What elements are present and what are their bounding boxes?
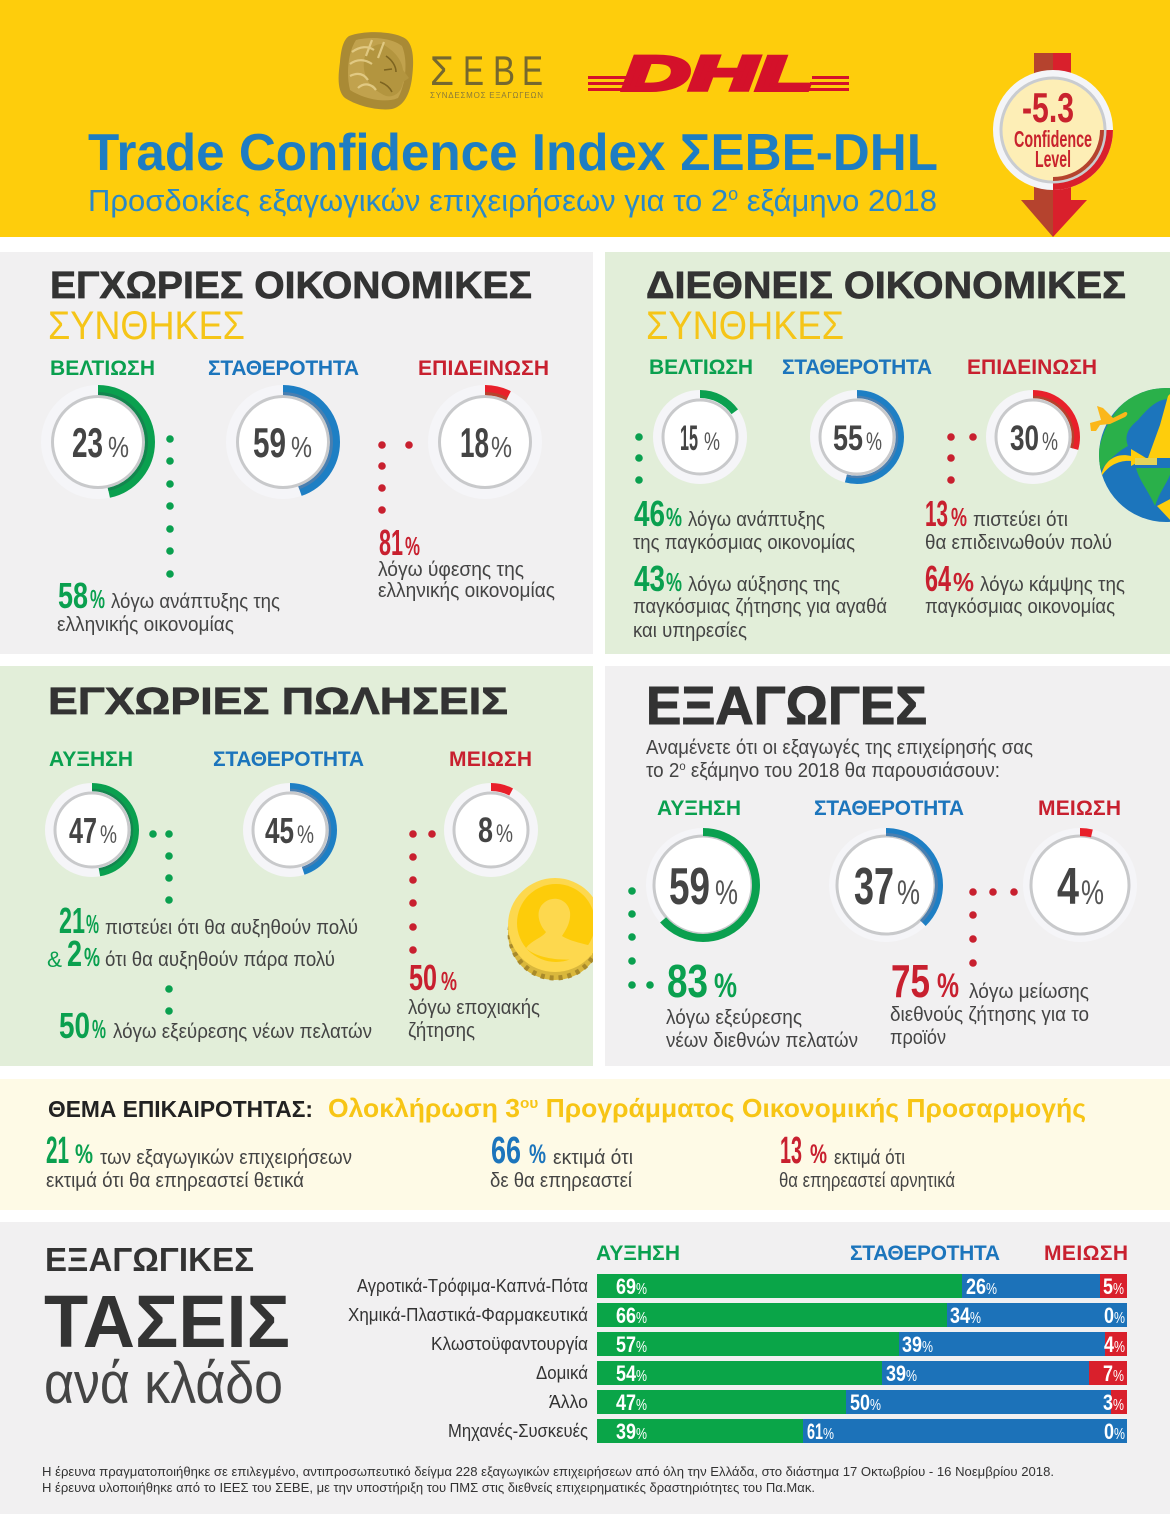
row: chemicals <box>348 1303 1127 1328</box>
improvement column label: ΒΕΛΤΙΩΣΗ <box>649 356 753 379</box>
heading: ΔΙΕΘΝΕΙΣ ΟΙΚΟΝΟΜΙΚΕΣ <box>646 265 1126 307</box>
increase column label: ΑΥΞΗΣΗ <box>49 748 133 771</box>
row: machinery: % <box>636 1426 647 1443</box>
row: construction: % <box>636 1368 647 1385</box>
improvement column label: ΒΕΛΤΙΩΣΗ <box>50 357 155 380</box>
row: agriculture: 69 <box>616 1274 636 1299</box>
stat 21% and 2%: % <box>84 942 100 972</box>
donut 55%: 55 <box>833 419 863 458</box>
stat 43%: λόγω αύξησης της <box>688 574 840 596</box>
stat 81%: ελληνικής οικονομίας <box>378 580 555 602</box>
stat 64%: λόγω κάμψης της <box>980 574 1125 596</box>
footnote <box>42 1464 1054 1495</box>
panel: header <box>0 0 1170 237</box>
donut 18%: % <box>491 432 512 464</box>
row: machinery: % <box>1114 1426 1125 1443</box>
row: construction: Δομικά <box>536 1363 588 1383</box>
donut 59%: 59 <box>253 419 286 466</box>
heading: ΕΞΑΓΩΓΙΚΕΣ <box>45 1241 254 1278</box>
stat 58%: λόγω ανάπτυξης της <box>111 591 280 613</box>
row: other: % <box>870 1397 881 1414</box>
row: textiles: 4 <box>1104 1332 1115 1357</box>
donut 59%: 59 <box>669 858 710 916</box>
logo: SEVE wordmark: Ε <box>463 47 484 94</box>
stat 50% new customers: % <box>92 1014 106 1044</box>
row: construction: 39 <box>886 1361 906 1386</box>
question: εξάμηνο του 2018 θα παρουσιάσουν: <box>686 760 1000 782</box>
row: textiles: 57 <box>616 1332 636 1357</box>
stat 58%: % <box>90 584 105 614</box>
row: machinery <box>448 1419 1127 1444</box>
donut 37% <box>829 828 943 942</box>
dotted connector green <box>149 830 173 1015</box>
stat 66%: 66 <box>491 1130 521 1172</box>
donut 55% <box>810 390 904 484</box>
donut 4%: % <box>1081 874 1104 912</box>
logo: SEVE wordmark: Β <box>493 47 515 94</box>
question <box>646 737 1033 782</box>
stat 21% and 2%: πιστεύει ότι θα αυξηθούν πολύ <box>105 917 358 939</box>
stat 81% <box>378 522 555 602</box>
donut 15% <box>653 390 747 484</box>
heading <box>48 265 532 348</box>
dotted connector red <box>969 888 1018 967</box>
worsening column label: ΕΠΙΔΕΙΝΩΣΗ <box>967 356 1097 379</box>
stat 13%: % <box>810 1139 827 1169</box>
donut 59% <box>646 828 760 942</box>
row: machinery: 61 <box>807 1419 823 1444</box>
stat 50% seasonal: λόγω εποχιακής <box>408 997 540 1019</box>
heading: ΕΞΑΓΩΓΕΣ <box>646 676 927 736</box>
row: machinery: Μηχανές-Συσκευές <box>448 1421 588 1441</box>
donut 59%: % <box>715 874 738 912</box>
question: Αναμένετε ότι οι εξαγωγές της επιχείρησής σας <box>646 737 1033 759</box>
row: machinery: 39 <box>616 1419 636 1444</box>
row: agriculture: Αγροτικά-Τρόφιμα-Καπνά-Πότα <box>357 1276 588 1296</box>
row: machinery: 0 <box>1104 1419 1114 1444</box>
donut 23% <box>41 385 155 499</box>
subtitle: ο <box>728 184 738 204</box>
stat 75%: διεθνούς ζήτησης για το <box>890 1004 1089 1026</box>
dotted connector red <box>409 830 436 954</box>
decrease column label: ΜΕΙΩΣΗ <box>449 748 532 771</box>
dotted connector green <box>166 435 174 578</box>
heading: ανά κλάδο <box>44 1351 283 1416</box>
heading: ΤΑΣΕΙΣ <box>44 1280 290 1363</box>
donut 4% <box>1023 828 1137 942</box>
row: other: % <box>636 1397 647 1414</box>
stat 64%: παγκόσμιας οικονομίας <box>925 596 1115 618</box>
row: textiles <box>431 1332 1127 1357</box>
row: machinery: % <box>823 1426 834 1443</box>
stat 46%: 46 <box>634 493 665 534</box>
row: other: 50 <box>850 1390 870 1415</box>
donut 30%: % <box>1042 428 1058 456</box>
stat 13%: % <box>951 502 967 532</box>
stat 13%: πιστεύει ότι <box>973 509 1068 531</box>
panel: exports <box>605 666 1170 1066</box>
donut 8%: % <box>496 820 513 848</box>
logo: SEVE wordmark: ΣΥΝΔΕΣΜΟΣ ΕΞΑΓΩΓΕΩΝ <box>430 91 543 100</box>
stat 13%: 13 <box>780 1130 802 1172</box>
logo: SEVE wordmark: Σ <box>430 47 454 94</box>
donut 45% <box>243 783 337 877</box>
row: chemicals: % <box>1114 1310 1125 1327</box>
stat 13% <box>925 493 1112 554</box>
stat 43%: παγκόσμιας ζήτησης για αγαθά <box>633 596 887 618</box>
stat 21% and 2%: 21 <box>59 900 85 941</box>
stat 46%: της παγκόσμιας οικονομίας <box>633 532 855 554</box>
footnote: Η έρευνα υλοποιήθηκε από το ΙΕΕΣ του ΣΕΒΕ, με την υποστήριξη του ΠΜΣ στις διεθνείς επιχειρηματικές δραστηριότητες του Πα.Μακ. <box>42 1480 815 1495</box>
confidence badge: Level <box>1035 146 1071 172</box>
row: textiles: % <box>922 1339 933 1356</box>
row: construction: 54 <box>616 1361 637 1386</box>
stat 50% seasonal: % <box>441 966 457 996</box>
donut 23%: % <box>108 432 129 464</box>
stat 21% and 2% <box>47 900 358 974</box>
stat 13%: θα επηρεαστεί αρνητικά <box>779 1170 955 1192</box>
row: chemicals: 0 <box>1104 1303 1114 1328</box>
donut 47% <box>45 783 139 877</box>
stat 64% <box>925 558 1125 618</box>
row: construction <box>536 1361 1127 1386</box>
stat 21% and 2%: 2 <box>67 933 82 974</box>
row: construction: % <box>906 1368 917 1385</box>
donut 47%: 47 <box>69 810 97 851</box>
stat 75%: προϊόν <box>890 1027 946 1049</box>
stat 46% <box>633 493 855 554</box>
stat 21% and 2%: ότι θα αυξηθούν πάρα πολύ <box>105 949 335 971</box>
stat 21%: των εξαγωγικών επιχειρήσεων <box>100 1147 352 1169</box>
stat 50% seasonal <box>408 957 540 1042</box>
logo: DHL: DHL <box>623 48 813 101</box>
stat 83%: 83 <box>667 955 708 1007</box>
stat 66%: % <box>529 1139 546 1169</box>
row: agriculture: 26 <box>966 1274 986 1299</box>
stat 83% <box>666 955 858 1052</box>
stat 64%: 64 <box>925 558 951 599</box>
stability column label: ΣΤΑΘΕΡΟΤΗΤΑ <box>814 797 964 820</box>
stat 58% <box>57 575 280 636</box>
heading: ΣΥΝΘΗΚΕΣ <box>646 304 844 348</box>
row: chemicals: Χημικά-Πλαστικά-Φαρμακευτικά <box>348 1305 588 1325</box>
icon: globe with plane <box>1090 385 1170 525</box>
stat 58%: ελληνικής οικονομίας <box>57 614 234 636</box>
dotted connector red <box>947 433 977 484</box>
donut 30% <box>986 390 1080 484</box>
subtitle: Προσδοκίες εξαγωγικών επιχειρήσεων για το 2 <box>88 183 728 218</box>
theme title: Ολοκλήρωση 3 <box>328 1093 516 1123</box>
stability column label: ΣΤΑΘΕΡΟΤΗΤΑ <box>782 356 932 379</box>
stat 50% seasonal: ζήτησης <box>408 1020 475 1042</box>
donut 23%: 23 <box>72 419 103 466</box>
heading <box>646 265 1126 348</box>
subtitle: εξάμηνο 2018 <box>738 183 937 218</box>
increase column label: ΑΥΞΗΣΗ <box>657 797 741 820</box>
donut 47%: % <box>100 821 117 849</box>
stat 50% new customers <box>59 1005 372 1046</box>
stat 21% <box>46 1130 352 1192</box>
donut 59%: % <box>291 432 312 464</box>
row: chemicals: % <box>970 1310 981 1327</box>
row: chemicals: % <box>636 1310 647 1327</box>
row: textiles: Κλωστοϋφαντουργία <box>431 1334 588 1354</box>
donut 45%: % <box>297 821 314 849</box>
row: chemicals: 66 <box>616 1303 636 1328</box>
donut 8%: 8 <box>478 811 493 850</box>
stat 43% <box>633 558 887 642</box>
stat 50% new customers: λόγω εξεύρεσης νέων πελατών <box>113 1021 372 1043</box>
theme title: Προγράμματος Οικονομικής Προσαρμογής <box>538 1093 1086 1123</box>
row: construction: % <box>1113 1368 1124 1385</box>
panel: domestic economic conditions <box>0 252 593 654</box>
title: Trade Confidence Index ΣΕΒΕ-DHL <box>88 124 938 182</box>
stat 13%: εκτιμά ότι <box>834 1147 905 1169</box>
donut 37%: 37 <box>854 858 894 916</box>
row: agriculture: % <box>1113 1281 1124 1298</box>
panel: topical theme <box>0 1079 1170 1210</box>
confidence badge: -5.3 <box>1022 84 1074 131</box>
stat 81%: 81 <box>379 522 403 563</box>
stat 13% <box>779 1130 955 1192</box>
stat 64%: % <box>953 567 974 597</box>
stat 21% and 2%: % <box>86 909 99 939</box>
row: agriculture: % <box>636 1281 647 1298</box>
row: agriculture: 5 <box>1103 1274 1113 1299</box>
stat 43%: 43 <box>634 558 665 599</box>
stat 21%: εκτιμά ότι θα επηρεαστεί θετικά <box>46 1170 304 1192</box>
legend header increase: ΑΥΞΗΣΗ <box>596 1242 680 1265</box>
donut 4%: 4 <box>1057 858 1079 916</box>
row: chemicals: 34 <box>950 1303 971 1328</box>
stat 13%: θα επιδεινωθούν πολύ <box>925 532 1112 554</box>
stat 13%: 13 <box>925 493 948 534</box>
donut 18% <box>428 385 542 499</box>
heading <box>44 1241 290 1416</box>
stat 75% <box>890 955 1089 1049</box>
worsening column label: ΕΠΙΔΕΙΝΩΣΗ <box>418 357 549 380</box>
stat 21%: 21 <box>46 1130 69 1172</box>
stat 75%: % <box>937 967 959 1005</box>
row: textiles: % <box>636 1339 647 1356</box>
stat 46%: λόγω ανάπτυξης <box>688 509 825 531</box>
stat 50% new customers: 50 <box>59 1005 90 1046</box>
question: ο <box>679 759 686 773</box>
donut 45%: 45 <box>265 810 294 851</box>
stat 83%: λόγω εξεύρεσης <box>666 1007 802 1029</box>
stability column label: ΣΤΑΘΕΡΟΤΗΤΑ <box>208 357 359 380</box>
panel: export trends by sector <box>0 1222 1170 1514</box>
row: construction: 7 <box>1103 1361 1113 1386</box>
dotted connector green <box>628 887 654 989</box>
stat 81%: % <box>405 531 420 561</box>
stat 81%: λόγω ύφεσης της <box>378 559 524 581</box>
row: other: % <box>1113 1397 1124 1414</box>
theme label: ΘΕΜΑ ΕΠΙΚΑΙΡΟΤΗΤΑΣ: <box>48 1096 313 1122</box>
stat 75%: λόγω μείωσης <box>969 981 1089 1003</box>
row: agriculture <box>357 1274 1127 1299</box>
stat 21% and 2%: & <box>47 947 62 972</box>
stat 43%: % <box>666 567 682 597</box>
footnote: Η έρευνα πραγματοποιήθηκε σε επιλεγμένο, αντιπροσωπευτικό δείγμα 228 εξαγωγικών επιχειρήσεων από όλη την Ελλάδα, στο διάστημα 17 Οκτωβρίου - 16 Νοεμβρίου 2018. <box>42 1464 1054 1479</box>
heading: ΕΓΧΩΡΙΕΣ ΠΩΛΗΣΕΙΣ <box>48 681 508 723</box>
dotted connector red <box>378 441 413 514</box>
stat 66%: εκτιμά ότι <box>553 1147 633 1169</box>
logo: SEVE wordmark <box>430 47 543 100</box>
row: other: 3 <box>1103 1390 1113 1415</box>
donut 55%: % <box>866 428 882 456</box>
logo: SEVE coin <box>339 32 413 109</box>
confidence badge <box>993 53 1113 237</box>
row: agriculture: % <box>986 1281 997 1298</box>
panel: domestic sales <box>0 666 602 1066</box>
heading: ΕΓΧΩΡΙΕΣ ΟΙΚΟΝΟΜΙΚΕΣ <box>50 265 532 307</box>
donut 59% <box>226 385 340 499</box>
donut 15%: 15 <box>680 419 698 458</box>
stat 50% seasonal: 50 <box>409 957 437 998</box>
donut 18%: 18 <box>460 419 489 466</box>
stacked bar chart <box>348 1274 1127 1444</box>
legend header stability: ΣΤΑΘΕΡΟΤΗΤΑ <box>850 1242 1000 1265</box>
row: other: Άλλο <box>549 1392 588 1412</box>
stat 46%: % <box>666 502 682 532</box>
logo: DHL <box>588 48 849 101</box>
donut 15%: % <box>704 428 720 456</box>
panel: international economic conditions <box>605 252 1170 654</box>
stat 83%: % <box>714 967 737 1005</box>
question: το 2 <box>646 760 681 782</box>
legend header decrease: ΜΕΙΩΣΗ <box>1044 1242 1128 1265</box>
row: other <box>549 1390 1127 1415</box>
stability column label: ΣΤΑΘΕΡΟΤΗΤΑ <box>213 748 364 771</box>
stat 43%: και υπηρεσίες <box>633 620 747 642</box>
donut 30%: 30 <box>1010 419 1039 458</box>
donut 8% <box>444 783 538 877</box>
row: textiles: % <box>1114 1339 1125 1356</box>
stat 66%: δε θα επηρεαστεί <box>490 1170 633 1192</box>
theme title: ου <box>520 1095 539 1112</box>
stat 66% <box>490 1130 633 1192</box>
heading: ΣΥΝΘΗΚΕΣ <box>48 304 245 348</box>
dotted connector green <box>635 433 643 484</box>
decrease column label: ΜΕΙΩΣΗ <box>1038 797 1121 820</box>
stat 83%: νέων διεθνών πελατών <box>666 1030 858 1052</box>
icon: gold coin <box>508 878 602 980</box>
stat 75%: 75 <box>891 955 930 1007</box>
logo: SEVE wordmark: Ε <box>522 47 543 94</box>
donut 37%: % <box>897 874 920 912</box>
confidence badge: Confidence <box>1014 126 1092 152</box>
stat 58%: 58 <box>58 575 88 616</box>
row: textiles: 39 <box>902 1332 922 1357</box>
row: other: 47 <box>616 1390 636 1415</box>
stat 21%: % <box>75 1139 93 1169</box>
